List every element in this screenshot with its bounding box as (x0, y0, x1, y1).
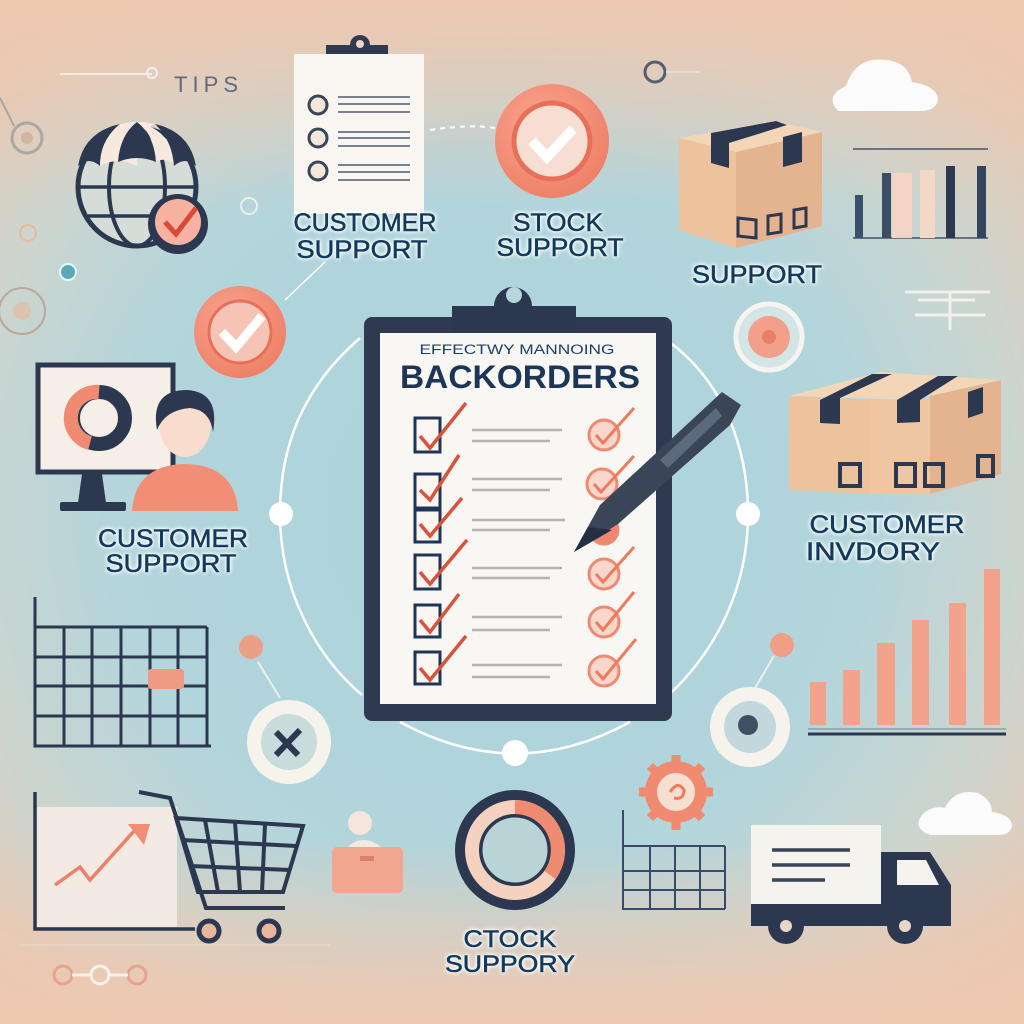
icon: padlock (332, 811, 403, 893)
icon: small ring top (645, 62, 700, 82)
tips label: TIPS (174, 72, 238, 97)
icon: cloud lower right (918, 792, 1012, 835)
icon: left side nodes (0, 98, 257, 334)
icon: check badge left (194, 286, 286, 378)
clipboard title small: EFFECTWY MANNOING (420, 342, 614, 357)
heading: stock support: STOCK (513, 209, 603, 237)
icon: delivery truck (751, 825, 951, 944)
heading: customer inventory (806, 511, 964, 566)
faint label right (905, 292, 990, 330)
icon: monitor with person (38, 365, 238, 511)
icon: shopping cart (139, 792, 303, 941)
checklist rows (415, 403, 636, 686)
icon: gear dial right (710, 633, 794, 767)
heading: support: SUPPORT (692, 261, 822, 289)
icon: parcel box top (679, 121, 822, 248)
heading: customer support top: SUPPORT (296, 236, 428, 264)
icon: globe with check (78, 122, 208, 254)
bar chart top right (853, 149, 988, 238)
clipboard title main: BACKORDERS (400, 359, 640, 395)
heading: customer support left (98, 525, 248, 578)
panel: clipboard checklist top (294, 35, 424, 214)
icon: coral gear (639, 755, 713, 830)
icon: parcel boxes right (789, 372, 1001, 494)
heading: stock support bottom (445, 926, 575, 978)
panel: central clipboard (364, 287, 741, 721)
heading: customer support top (294, 209, 436, 264)
bar chart right (808, 569, 1006, 734)
heading: customer support top: CUSTOMER (294, 209, 436, 237)
icon: target dial right (736, 304, 802, 370)
icon: calendar grid left (35, 597, 211, 746)
icon: node small left (239, 635, 280, 698)
heading: customer inventory: CUSTOMER (810, 511, 964, 539)
heading: stock support: SUPPORT (496, 234, 624, 262)
icon: calendar grid bottom (623, 810, 725, 909)
heading: customer support left: SUPPORT (106, 550, 236, 578)
panel: growth chart bottom left (35, 792, 195, 929)
heading: stock support bottom: CTOCK (464, 926, 556, 953)
icon: check badge top (495, 84, 609, 198)
tips label (60, 68, 238, 97)
icon: pen (574, 392, 741, 552)
icon: cloud top right (833, 60, 938, 111)
heading: customer support left: CUSTOMER (98, 525, 248, 553)
icon: bottom rings (20, 945, 330, 984)
icon: percent dial (247, 700, 331, 784)
heading: stock support (496, 209, 624, 262)
icon: donut (455, 790, 575, 910)
heading: stock support bottom: SUPPORY (445, 951, 575, 978)
heading: customer inventory: INVDORY (806, 538, 940, 566)
central orbit ring (269, 126, 760, 766)
